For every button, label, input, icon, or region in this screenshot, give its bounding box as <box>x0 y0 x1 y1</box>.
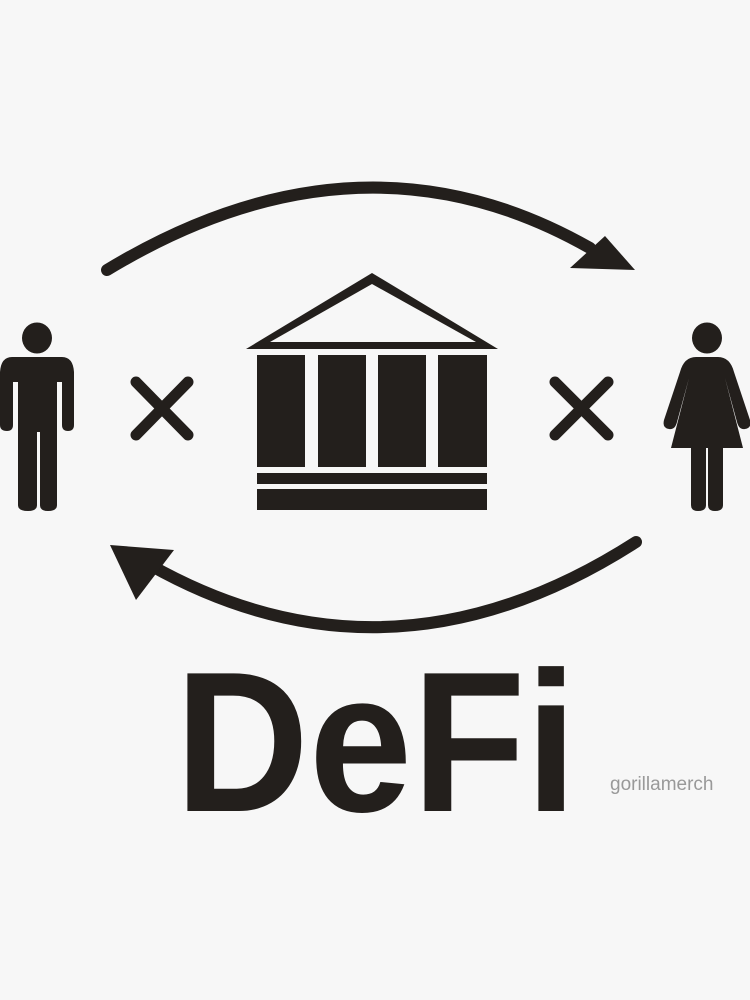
icon: man <box>0 322 74 511</box>
icon: right cross <box>555 382 608 435</box>
title: DeFi: DeFi <box>175 631 577 854</box>
icon: woman <box>664 322 750 511</box>
icon: bank <box>246 273 498 510</box>
watermark: gorillamerch <box>610 774 713 795</box>
icon: left cross <box>136 382 188 435</box>
arrow: top arc <box>107 188 635 270</box>
arrow: bottom arc <box>110 542 636 627</box>
